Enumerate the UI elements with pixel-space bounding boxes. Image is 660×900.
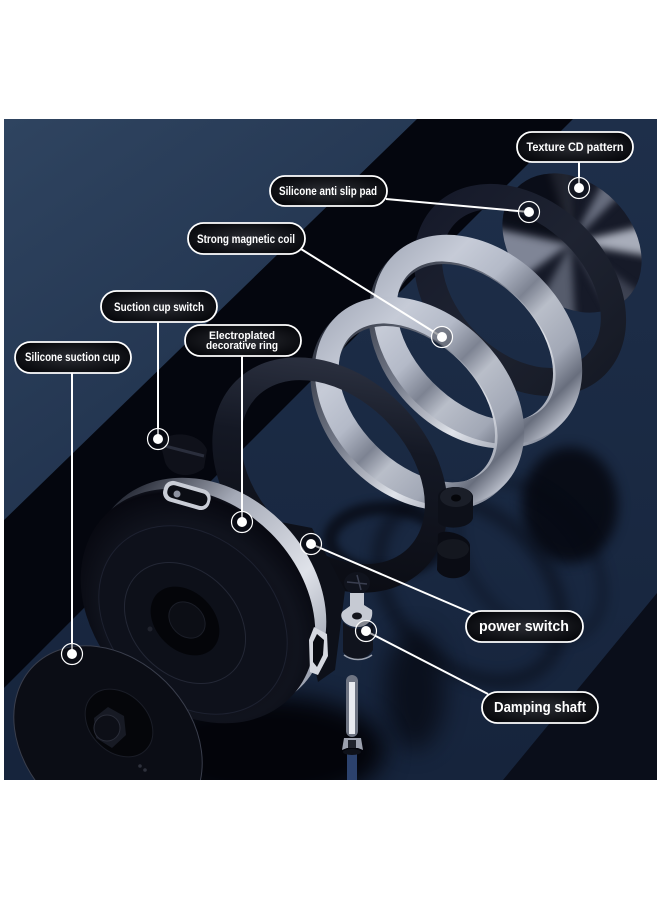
label: Texture CD pattern [517, 132, 633, 162]
label: Silicone anti slip pad [270, 176, 387, 206]
blurred ring shadows [192, 442, 623, 780]
damping shaft parts [341, 572, 373, 780]
label: Electroplated decorative ring: Electroplated [209, 330, 275, 342]
label: Strong magnetic coil [188, 223, 305, 254]
label: Electroplated decorative ring [185, 325, 301, 356]
blue cable [347, 754, 357, 780]
label: Silicone suction cup: Silicone suction cup [25, 352, 120, 364]
device centre hub [148, 586, 220, 656]
label: power switch: power switch [479, 618, 569, 635]
electroplated decorative ring [212, 357, 473, 593]
label: Suction cup switch [101, 291, 217, 322]
suction cup switch block [160, 434, 207, 475]
label: Strong magnetic coil: Strong magnetic coil [197, 234, 295, 246]
power switch housing [282, 522, 345, 682]
label: Texture CD pattern: Texture CD pattern [526, 142, 624, 154]
label: power switch [466, 611, 583, 642]
label: Damping shaft: Damping shaft [494, 699, 586, 716]
side slot in rim [309, 627, 328, 675]
strong magnetic coil ring, front [310, 297, 524, 508]
ring bracket lugs [437, 487, 473, 578]
label: Silicone anti slip pad: Silicone anti slip pad [279, 186, 377, 198]
steel pin [342, 675, 363, 780]
lower right dark corner [503, 593, 657, 780]
label: Suction cup switch: Suction cup switch [114, 302, 204, 314]
CD texture disc [502, 173, 642, 312]
background panel [4, 119, 573, 688]
label: Damping shaft [482, 692, 598, 723]
right background area [4, 278, 415, 780]
damping knob [341, 572, 373, 660]
top slot in rim [163, 480, 211, 510]
device face [98, 525, 288, 715]
silicone suction cup disc [13, 645, 203, 780]
label: Electroplated decorative ring: decorative ring [206, 340, 278, 352]
silicone anti slip pad ring [414, 184, 626, 396]
strong magnetic coil ring, rear [370, 234, 582, 448]
callout leader lines and markers [62, 161, 590, 694]
label: Silicone suction cup [15, 342, 131, 373]
diagonal black band [0, 119, 573, 692]
main device body [84, 478, 345, 724]
infographic: exploded view of magnetic suction phone mount [4, 119, 657, 780]
